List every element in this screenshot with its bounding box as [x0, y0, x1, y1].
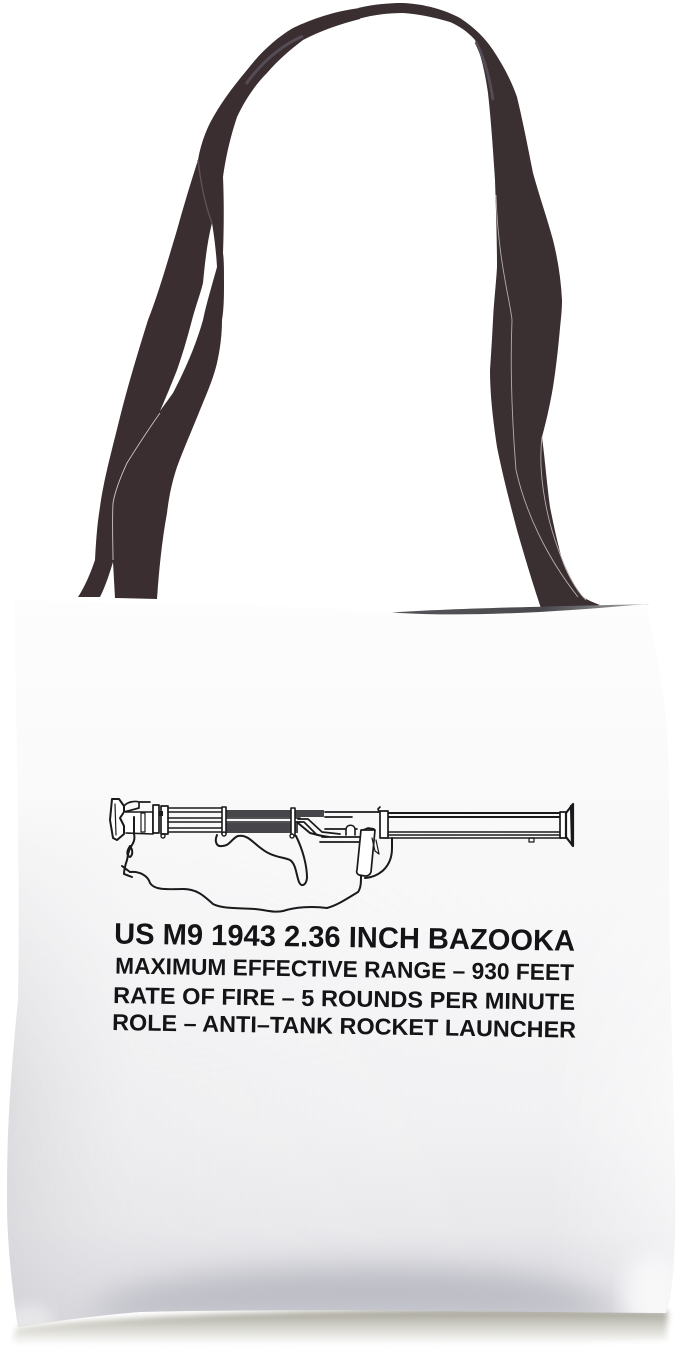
- firing cable: [216, 835, 307, 885]
- strap fold highlight: [198, 160, 212, 223]
- barrel bands: [222, 807, 226, 834]
- back strap: right handle: [358, 3, 600, 614]
- long cable: [130, 872, 361, 912]
- title: US M9 1943 2.36 INCH BAZOOKA: [114, 918, 575, 958]
- sight and rear housing: [124, 801, 150, 812]
- back strap: left handle: [78, 8, 360, 599]
- bag back edge: [385, 604, 650, 617]
- rear sight bump: [346, 825, 355, 835]
- bazooka illustration: [110, 799, 573, 912]
- tote bag body: [0, 595, 679, 1337]
- spec: role: ROLE – ANTI–TANK ROCKET LAUNCHER: [112, 1009, 577, 1043]
- ground shadow: [12, 1309, 668, 1346]
- firing wire loop: [365, 838, 392, 878]
- hatched barrel section: [226, 810, 324, 817]
- grip: [357, 830, 375, 876]
- shoulder frame: [110, 799, 124, 840]
- clamp: [153, 805, 159, 833]
- tube rails: [168, 808, 300, 832]
- bottom gusset shading: [90, 1268, 625, 1318]
- gap between left strands: [160, 223, 217, 411]
- forward tube: [388, 813, 561, 817]
- spec: maximum effective range: MAXIMUM EFFECTIVE RANGE – 930 FEET: [115, 953, 574, 985]
- strand seam: [113, 413, 160, 560]
- spec: rate of fire: RATE OF FIRE – 5 ROUNDS PER MINUTE: [113, 982, 575, 1015]
- chain: [122, 817, 134, 877]
- bottom fold brightening at corners: [620, 1262, 672, 1313]
